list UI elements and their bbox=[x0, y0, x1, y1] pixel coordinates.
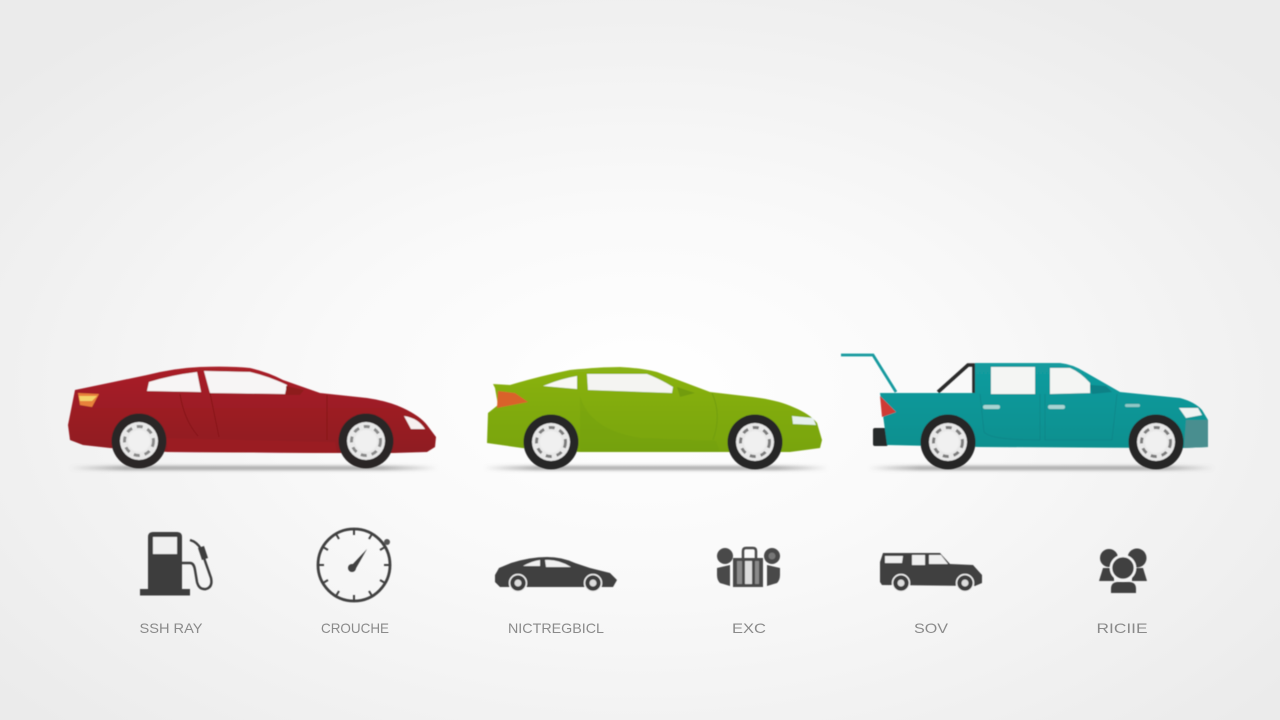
icon: gauge bbox=[318, 529, 390, 601]
label: people: RICIIE bbox=[1096, 620, 1148, 636]
shadow: green coupe bbox=[484, 466, 828, 470]
sill: red sedan bbox=[166, 438, 337, 453]
icon: SUV bbox=[880, 553, 982, 592]
front wheel: green coupe bbox=[728, 414, 782, 470]
door lines: teal pickup bbox=[980, 394, 1117, 440]
rear wheel: red sedan bbox=[112, 414, 166, 468]
front window: red sedan bbox=[204, 371, 287, 394]
body: teal pickup bbox=[880, 363, 1208, 448]
body: red sedan bbox=[68, 367, 436, 453]
front wheel: teal pickup bbox=[1128, 414, 1184, 470]
tail light: green coupe bbox=[497, 391, 528, 408]
label: gauge: CROUCHE bbox=[321, 620, 389, 636]
icon: sedan bbox=[495, 557, 617, 592]
rear window: red sedan bbox=[147, 372, 201, 392]
red sedan bbox=[68, 367, 438, 470]
shadow: red sedan bbox=[70, 466, 438, 470]
mirror: teal pickup bbox=[1090, 385, 1112, 394]
rear window: green coupe bbox=[543, 376, 577, 389]
front door window: teal pickup bbox=[1050, 368, 1090, 394]
label: fuel pump: SSH RAY bbox=[140, 620, 203, 636]
mirror: red sedan bbox=[286, 386, 304, 395]
teal pickup bbox=[841, 355, 1214, 470]
door handles: teal pickup bbox=[983, 405, 1000, 409]
roll bar: teal pickup bbox=[938, 365, 974, 393]
shadow: teal pickup bbox=[868, 466, 1214, 470]
icon: luggage bbox=[717, 548, 780, 587]
label: SUV: SOV bbox=[914, 620, 949, 636]
headlight: green coupe bbox=[792, 416, 816, 425]
rear bumper: teal pickup bbox=[873, 428, 888, 446]
front bumper: teal pickup bbox=[1184, 420, 1208, 448]
mirror: green coupe bbox=[677, 387, 695, 397]
rear door window: teal pickup bbox=[991, 367, 1035, 394]
tail light: red sedan bbox=[78, 393, 99, 407]
door lines: red sedan bbox=[180, 393, 327, 440]
label: luggage: EXC bbox=[732, 620, 766, 636]
tail light: teal pickup bbox=[880, 396, 896, 417]
headlight: teal pickup bbox=[1179, 408, 1202, 418]
rear wheel: green coupe bbox=[524, 414, 578, 470]
front window: green coupe bbox=[587, 374, 673, 393]
green coupe bbox=[484, 367, 828, 470]
body: green coupe bbox=[487, 367, 822, 452]
front wheel: red sedan bbox=[338, 414, 394, 468]
icon: people bbox=[1099, 548, 1147, 593]
tailgate: teal pickup bbox=[841, 355, 896, 392]
icon: fuel pump bbox=[140, 532, 211, 596]
label: sedan: NICTREGBICL bbox=[508, 620, 604, 636]
rear wheel: teal pickup bbox=[920, 414, 976, 470]
door line: green coupe bbox=[712, 393, 717, 440]
body shading: green coupe bbox=[580, 396, 720, 452]
headlight: red sedan bbox=[404, 416, 425, 429]
